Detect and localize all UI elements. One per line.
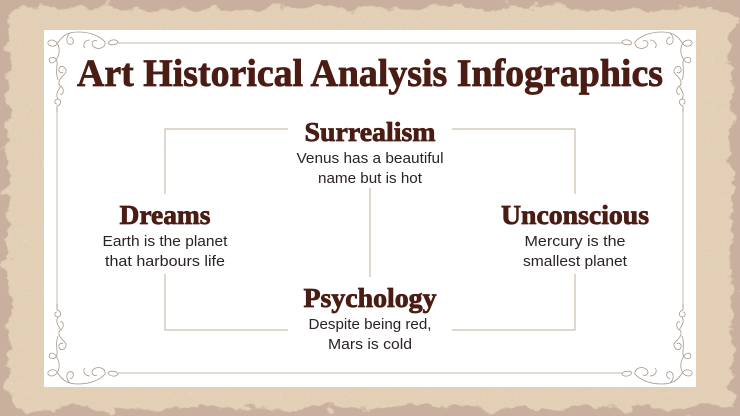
block: Dreams: Earth is the planet <box>102 234 228 250</box>
block: Surrealism: Surrealism <box>304 117 436 147</box>
block: Dreams: Dreams <box>120 200 210 230</box>
connector: unconscious to psychology <box>452 274 575 330</box>
block: Surrealism: name but is hot <box>318 171 422 187</box>
white card <box>44 30 696 387</box>
block: Dreams <box>102 200 228 270</box>
icon: top-right corner flourish <box>622 32 692 112</box>
block: Dreams: that harbours life <box>105 254 225 270</box>
connector: surrealism to dreams <box>165 129 288 194</box>
block: Unconscious: Unconscious <box>501 200 649 230</box>
title: Art Historical Analysis Infographics <box>77 52 663 95</box>
connector: dreams to psychology <box>165 274 288 330</box>
block: Psychology: Psychology <box>304 283 437 313</box>
block: Surrealism: Venus has a beautiful <box>296 151 444 167</box>
block: Unconscious: Mercury is the <box>524 234 626 250</box>
block: Unconscious: smallest planet <box>523 254 627 270</box>
block: Unconscious <box>501 200 649 270</box>
icon: bottom-left corner flourish <box>48 304 118 384</box>
icon: bottom-right corner flourish <box>622 304 692 384</box>
connector: surrealism to unconscious <box>452 129 575 194</box>
block: Psychology: Despite being red, <box>308 317 432 333</box>
ornamental frame <box>48 32 692 384</box>
icon: top-left corner flourish <box>48 32 118 112</box>
block: Psychology <box>304 283 437 353</box>
block: Surrealism <box>296 117 444 187</box>
block: Psychology: Mars is cold <box>328 337 412 353</box>
connector: surrealism to psychology <box>369 188 371 277</box>
